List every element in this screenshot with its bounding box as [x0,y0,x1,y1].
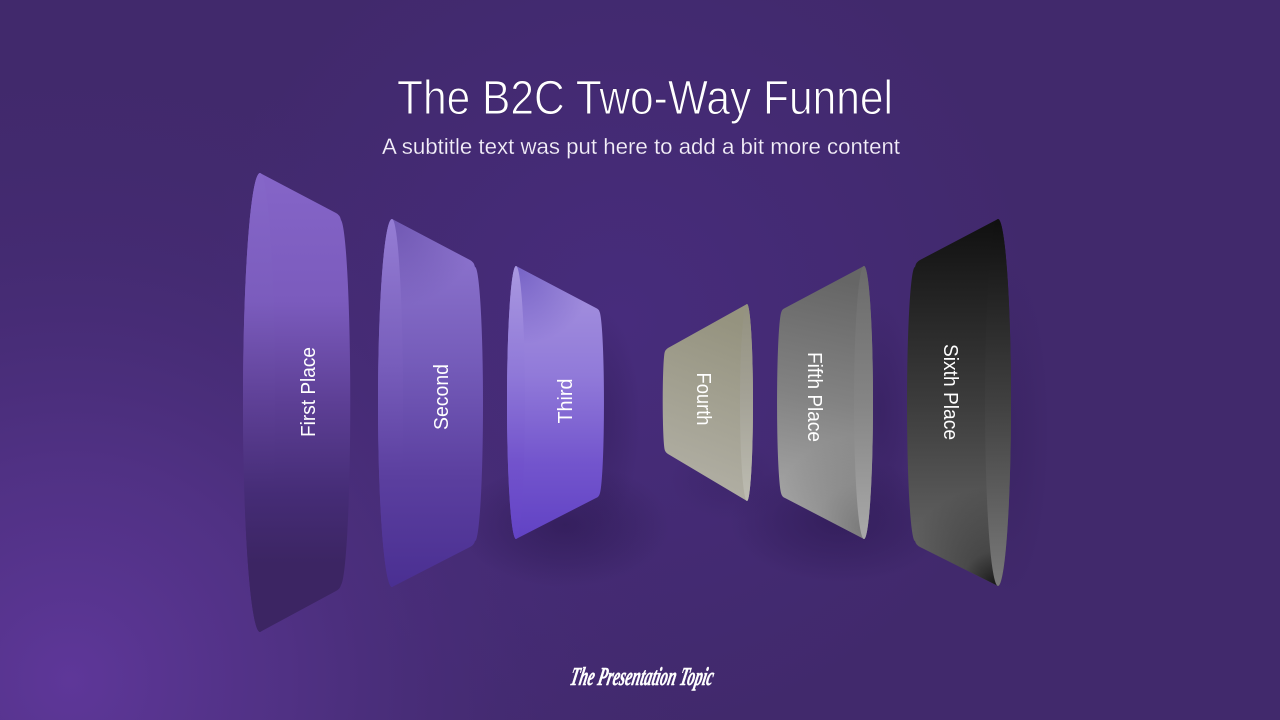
funnel segment: First Place [243,173,350,632]
third label: Third [555,378,577,424]
funnel segment: Third [507,266,604,539]
funnel segment: Second [378,219,483,587]
sixth apex shading [907,219,1011,586]
sixth cap [985,219,1011,586]
fourth label: Fourth [692,372,714,426]
second label: Second [431,364,453,430]
funnel segment: Fifth Place [777,266,873,539]
fourth cap [740,304,753,501]
title: The B2C Two-Way Funnel [397,72,893,125]
fourth body [663,304,753,501]
subtitle: A subtitle text was put here to add a bit more content [382,134,900,159]
funnel segment: Sixth Place [907,219,1011,586]
second body shading [378,219,483,587]
second cap [378,219,403,587]
first body [243,173,350,632]
second body [378,219,483,587]
drop shadows under funnel segments [460,260,1050,600]
fifth body [777,266,873,539]
fifth body shading [777,266,873,539]
sixth body [907,219,1011,586]
fifth label: Fifth Place [803,352,825,442]
third body [507,266,604,539]
logo wordmark: The Presentation Topic [568,662,717,691]
third cap [507,266,525,539]
funnel segment: Fourth [663,304,753,501]
first cap [243,173,275,632]
third body shading [507,266,604,539]
fifth cap [854,266,873,539]
first label: First Place [298,347,320,437]
sixth label: Sixth Place [939,344,961,440]
